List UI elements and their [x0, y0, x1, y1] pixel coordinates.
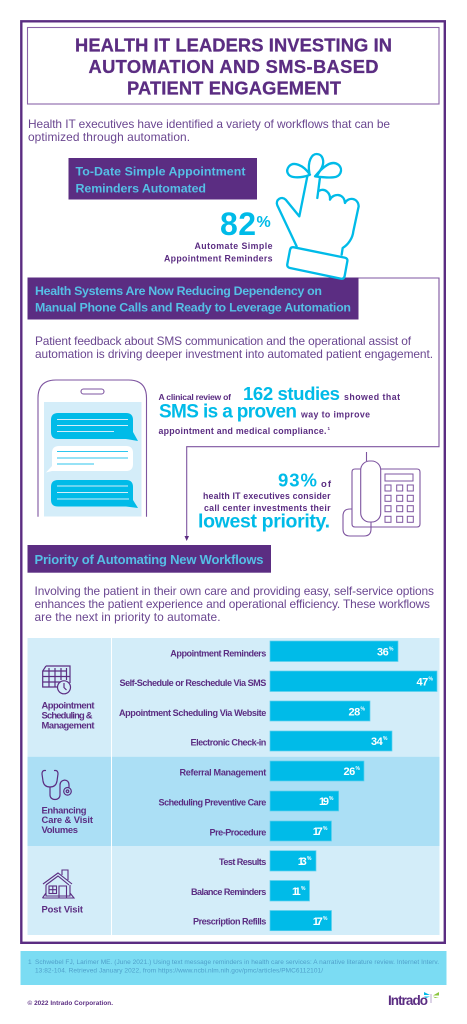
- icon: hand with ribbon: [277, 154, 359, 279]
- bar: referral management 26%: Referral Management: [180, 768, 266, 778]
- bar: balance reminders 11%: [191, 880, 310, 901]
- heading: to-date reminders: To-Date Simple Appointment: [76, 164, 246, 178]
- title: [28, 28, 439, 104]
- panel: post visit: [28, 846, 440, 935]
- bar: website scheduling 28%: Appointment Scheduling Via Website: [119, 708, 266, 718]
- stat: 93 percent: call center investments their: [204, 503, 331, 513]
- text: clinical review: 162 studies: [243, 383, 340, 404]
- bar: self-schedule 47%: 47: [416, 676, 428, 688]
- intro text: optimized through automation.: [28, 130, 190, 144]
- bar: self-schedule 47%: %: [428, 676, 434, 682]
- intro text: Health IT executives have identified a variety of workflows that can be: [28, 117, 390, 131]
- icon: stethoscope: [42, 770, 71, 800]
- title: HEALTH IT LEADERS INVESTING IN: [75, 35, 392, 56]
- bar: referral management 26%: %: [356, 766, 360, 772]
- bar: pre-procedure 17%: Pre-Procedure: [210, 828, 266, 838]
- bar: prescription refills 17%: 17: [313, 916, 323, 928]
- chart: workflow priorities: [28, 638, 440, 935]
- footnote: 13:82-104. Retrieved January 2022, from https://www.ncbi.nlm.nih.gov/pmc/articles/PMC6112101/: [35, 968, 323, 974]
- bar: self-schedule 47%: Self-Schedule or Reschedule Via SMS: [120, 678, 266, 688]
- label: appointment scheduling: Management: [42, 720, 94, 730]
- heading: to-date reminders: [68, 158, 257, 200]
- bar: balance reminders 11%: Balance Reminders: [191, 887, 266, 897]
- bar: referral management 26%: 26: [344, 766, 355, 778]
- stat: 93 percent: lowest priority.: [198, 511, 330, 533]
- paragraph: patient feedback: automation is driving deeper investment into automated patient engagement.: [35, 347, 433, 361]
- bar: pre-procedure 17%: 17: [313, 826, 323, 838]
- stat: 93 percent: [198, 470, 332, 533]
- bar: website scheduling 28%: 28: [348, 706, 360, 718]
- bar: preventive care 19%: %: [329, 796, 334, 802]
- bar: test results 13%: [219, 851, 316, 871]
- bar: preventive care 19%: 19: [319, 796, 329, 808]
- label: enhancing care: Enhancing: [42, 804, 87, 815]
- intro text: [28, 117, 390, 144]
- bar: test results 13%: %: [307, 856, 312, 862]
- column divider: [111, 638, 112, 935]
- heading: reducing dependency: [28, 278, 358, 320]
- bar: pre-procedure 17%: [210, 821, 332, 841]
- bar: electronic check-in 34%: [190, 731, 392, 751]
- stat: 82 percent: Automate Simple: [194, 241, 273, 251]
- heading: priority of automating: Priority of Automating New Workflows: [34, 552, 264, 567]
- stat: 82 percent: [164, 206, 273, 264]
- bar: balance reminders 11%: 11: [292, 886, 301, 898]
- text: clinical review: way to improve: [300, 410, 370, 420]
- text: clinical review: [158, 383, 400, 436]
- label: appointment scheduling: Appointment: [42, 700, 94, 711]
- title: AUTOMATION AND SMS-BASED: [88, 56, 378, 77]
- bar: electronic check-in 34%: %: [383, 736, 388, 742]
- stat: 82 percent: Appointment Reminders: [164, 254, 273, 264]
- bar: website scheduling 28%: [119, 701, 370, 721]
- panel: enhancing care: [28, 757, 440, 846]
- icon: calendar with clock: [43, 666, 70, 694]
- text: clinical review: showed that: [344, 392, 400, 402]
- heading: reducing dependency: Manual Phone Calls and Ready to Leverage Automation: [35, 301, 351, 315]
- stat: 82 percent: 82: [220, 206, 256, 242]
- bar: website scheduling 28%: %: [360, 706, 366, 712]
- stat: 93 percent: of: [321, 479, 332, 490]
- bar: balance reminders 11%: %: [301, 886, 306, 892]
- stat: 93 percent: 93%: [278, 470, 317, 491]
- bar: prescription refills 17%: %: [323, 916, 328, 922]
- footnote: 1: [28, 959, 32, 966]
- bar: self-schedule 47%: [120, 671, 437, 692]
- bar: appointment reminders 36%: 36: [377, 646, 389, 658]
- stat: 82 percent: %: [256, 214, 271, 231]
- paragraph: patient feedback: [35, 334, 433, 361]
- bar: preventive care 19%: [158, 791, 339, 811]
- bar: prescription refills 17%: [193, 910, 332, 931]
- bar: electronic check-in 34%: Electronic Check-in: [190, 738, 266, 748]
- label: enhancing care: Volumes: [42, 824, 78, 835]
- stat: 93 percent: health IT executives consider: [203, 491, 331, 501]
- paragraph: involving the patient: Involving the patient in their own care and providing easy, self-service options: [34, 584, 434, 598]
- text: clinical review: SMS is a proven: [159, 402, 297, 423]
- bar: prescription refills 17%: Prescription Refills: [193, 916, 266, 926]
- paragraph: involving the patient: enhances the patient experience and operational efficiency. These workflows: [34, 597, 430, 611]
- heading: to-date reminders: Reminders Automated: [76, 182, 206, 196]
- label: enhancing care: [42, 804, 93, 835]
- bar: electronic check-in 34%: 34: [371, 736, 384, 748]
- paragraph: involving the patient: are the next in priority to automate.: [34, 610, 220, 624]
- bar: referral management 26%: [180, 761, 364, 781]
- bar: appointment reminders 36%: [170, 641, 398, 662]
- icon: house: [42, 870, 74, 898]
- footnote: Schwebel FJ, Larimer ME. (June 2021.) Using text message reminders in health care services: A narrative literature review. Internet Interv.: [35, 959, 439, 966]
- bar: appointment reminders 36%: Appointment Reminders: [170, 648, 266, 658]
- bar: preventive care 19%: Scheduling Preventive Care: [158, 798, 266, 808]
- heading: reducing dependency: Health Systems Are Now Reducing Dependency on: [35, 284, 322, 298]
- copyright: © 2022 Intrado Corporation.: [28, 999, 113, 1007]
- label: appointment scheduling: Scheduling &: [42, 710, 93, 720]
- bar: appointment reminders 36%: %: [389, 646, 394, 652]
- label: post visit: Post Visit: [42, 903, 83, 914]
- logo: Intrado: Intrado: [388, 993, 428, 1008]
- text: clinical review: 1: [328, 426, 330, 431]
- text: clinical review: A clinical review of: [158, 392, 231, 402]
- text: clinical review: appointment and medical compliance.: [158, 426, 326, 436]
- label: appointment scheduling: [42, 700, 94, 730]
- paragraph: patient feedback: Patient feedback about SMS communication and the operational assist of: [35, 334, 412, 348]
- title: PATIENT ENGAGEMENT: [127, 78, 341, 98]
- panel: appointment scheduling: [28, 638, 440, 757]
- bar: test results 13%: Test Results: [219, 857, 266, 867]
- paragraph: involving the patient: [34, 584, 434, 624]
- icon: desk telephone: [343, 452, 420, 536]
- bar: pre-procedure 17%: %: [323, 826, 328, 832]
- label: enhancing care: Care & Visit: [42, 814, 93, 825]
- heading: priority of automating: [28, 545, 271, 573]
- bar: test results 13%: 13: [298, 856, 307, 868]
- icon: smartphone with messages: [38, 380, 146, 517]
- footnote: [20, 951, 446, 985]
- connector arrow: [184, 278, 439, 541]
